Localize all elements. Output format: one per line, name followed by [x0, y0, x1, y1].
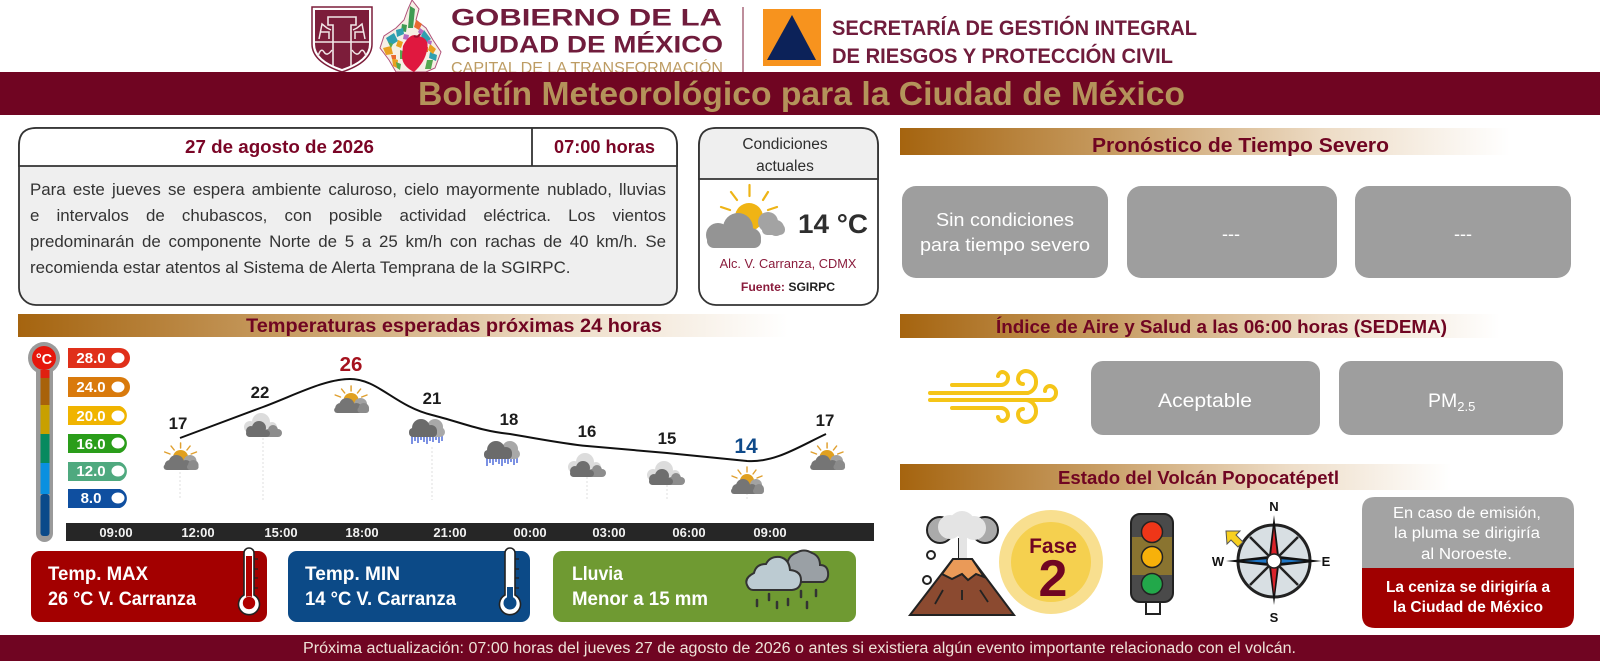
logo text: Secretaría: SECRETARÍA DE GESTIÓN INTEGRAL [832, 15, 1197, 40]
time: 07:00 horas [554, 137, 655, 157]
air status [1091, 361, 1320, 435]
heading [900, 314, 1500, 338]
title band [0, 72, 1600, 115]
icon: compass [1212, 499, 1331, 625]
heading [900, 464, 1452, 490]
heading [18, 314, 788, 337]
time axis: 15:00 [264, 525, 298, 540]
heading: Estado del Volcán Popocatépetl [1058, 467, 1339, 488]
logo: civil protection [763, 9, 821, 66]
legend: 12.0 [76, 463, 106, 480]
icon: thermometer hot [238, 548, 260, 615]
temperature values: 15 [658, 429, 676, 448]
footer band: Próxima actualización: 07:00 horas del jueves 27 de agosto de 2026 o antes si existiera algún evento importante relacionado con el volcán. [303, 640, 1296, 657]
temperature values: 16 [578, 422, 596, 441]
legend: 16.0 [76, 436, 106, 453]
temperature values: 14 [734, 435, 758, 458]
severe status 3 [1355, 186, 1571, 278]
card: minimum temperature [288, 548, 530, 622]
legend: 20.0 [76, 408, 106, 425]
card: minimum temperature: Temp. MIN [305, 564, 400, 585]
phase badge [999, 510, 1103, 614]
logo text: Secretaría: DE RIESGOS Y PROTECCIÓN CIVIL [832, 43, 1173, 68]
plume text: la pluma se dirigiría [1394, 525, 1540, 542]
logo text: Gobierno de la Ciudad de México: GOBIERNO DE LA [451, 4, 722, 32]
card: minimum temperature: 14 °C V. Carranza [305, 589, 456, 610]
heading: Condiciones [742, 136, 828, 153]
line chart: temperature curve [180, 379, 826, 461]
temperature: 14 °C [798, 209, 868, 239]
forecast text [30, 180, 666, 277]
card: rain: Lluvia [572, 564, 623, 585]
forecast text: e intervalos de chubascos, con posible actividad eléctrica. Los vientos [30, 206, 666, 225]
phase badge: 2 [1039, 550, 1067, 608]
weather icons [164, 386, 845, 494]
icon: thermometer cold [500, 548, 520, 615]
temperature values: 22 [251, 383, 269, 402]
phase badge: Fase [1029, 535, 1077, 558]
legend [68, 348, 130, 508]
card: maximum temperature [31, 548, 267, 622]
ash text: La ceniza se dirigiría a [1386, 579, 1550, 596]
severe status 3: --- [1454, 224, 1472, 244]
card: maximum temperature: 26 °C V. Carranza [48, 589, 196, 610]
icon: rain clouds [746, 550, 828, 608]
icon: volcano [910, 511, 1014, 615]
plume text [1393, 505, 1541, 563]
panel: current conditions [699, 128, 878, 305]
time axis: 09:00 [753, 525, 787, 540]
thermometer scale: °C [36, 352, 53, 368]
panel: Popocatépetl volcano [900, 464, 1574, 628]
title band: Boletín Meteorológico para la Ciudad de México [418, 76, 1185, 113]
icon: wind [930, 371, 1056, 422]
time axis: 00:00 [513, 525, 547, 540]
panel: temperatures next 24 hours [18, 314, 874, 542]
heading [900, 128, 1510, 157]
severe status 2 [1127, 186, 1337, 278]
panel: severe weather forecast [900, 128, 1571, 278]
icon: compass: S [1270, 610, 1279, 625]
logo text: Gobierno de la Ciudad de México: CIUDAD DE MÉXICO [451, 30, 723, 58]
heading: actuales [756, 158, 814, 175]
icon: sun behind cloud [706, 185, 785, 248]
thermometer scale [28, 342, 60, 542]
heading: Temperaturas esperadas próximas 24 horas [246, 315, 662, 337]
legend: 8.0 [81, 490, 101, 507]
time axis: 03:00 [592, 525, 626, 540]
severe status 1 [902, 186, 1108, 278]
forecast text: recomienda estar atentos al Sistema de Alerta Temprana de la SGIRPC. [30, 258, 570, 277]
air status: Aceptable [1158, 390, 1252, 412]
severe status 2: --- [1222, 224, 1240, 244]
logo tagline: CAPITAL DE LA TRANSFORMACIÓN [451, 60, 723, 77]
card: maximum temperature: Temp. MAX [48, 564, 148, 585]
logo: CDMX shield [312, 7, 372, 72]
temperature values: 18 [500, 410, 518, 429]
severe status 1: Sin condiciones [936, 209, 1074, 230]
time axis: 18:00 [345, 525, 379, 540]
plume info box [1362, 497, 1574, 628]
pollutant: PM [1428, 390, 1457, 412]
ash text: la Ciudad de México [1393, 599, 1543, 616]
icon: compass: E [1322, 554, 1331, 569]
icon: compass: W [1212, 554, 1225, 569]
legend: 28.0 [76, 350, 106, 367]
logo text: Gobierno de la Ciudad de México [451, 4, 723, 58]
temperature values: 21 [423, 389, 441, 408]
source: Fuente: SGIRPC [741, 280, 835, 294]
icon: traffic light [1131, 514, 1173, 614]
icon: wind direction arrow [1226, 531, 1243, 547]
legend: 24.0 [76, 379, 106, 396]
footer band [0, 635, 1600, 661]
ash text [1386, 579, 1550, 616]
panel: daily summary [19, 128, 677, 305]
plume text: En caso de emisión, [1393, 505, 1541, 522]
header logos [312, 0, 1197, 77]
temperature values [169, 353, 834, 458]
logo: colourful city silhouette [380, 0, 441, 72]
temperature values: 17 [816, 411, 834, 430]
time axis: 21:00 [433, 525, 467, 540]
forecast text: predominarán de componente Norte de 5 a 25 km/h con rachas de 40 km/h. Se [30, 232, 666, 251]
pollutant: 2.5 [1457, 399, 1475, 414]
heading: Pronóstico de Tiempo Severo [1092, 134, 1389, 157]
card: rain: Menor a 15 mm [572, 589, 708, 610]
heading: Índice de Aire y Salud a las 06:00 horas (SEDEMA) [996, 316, 1447, 337]
date: 27 de agosto de 2026 [185, 137, 374, 157]
severe status 1: para tiempo severo [920, 234, 1090, 255]
time axis [66, 523, 874, 541]
logo text: Secretaría [832, 15, 1197, 68]
heading [742, 136, 828, 175]
plume text: al Noroeste. [1421, 546, 1512, 563]
temperature values: 17 [169, 414, 187, 433]
card: rain [553, 550, 856, 622]
time axis: 12:00 [181, 525, 215, 540]
pollutant [1339, 361, 1563, 435]
forecast text: Para este jueves se espera ambiente caluroso, cielo mayormente nublado, lluvias [30, 180, 666, 199]
temperature values: 26 [340, 353, 362, 376]
time axis: 06:00 [672, 525, 706, 540]
time axis: 09:00 [99, 525, 133, 540]
icon: compass: N [1269, 499, 1279, 514]
location: Alc. V. Carranza, CDMX [720, 256, 857, 271]
panel: air quality [900, 314, 1563, 435]
forecast drop lines [180, 438, 747, 500]
